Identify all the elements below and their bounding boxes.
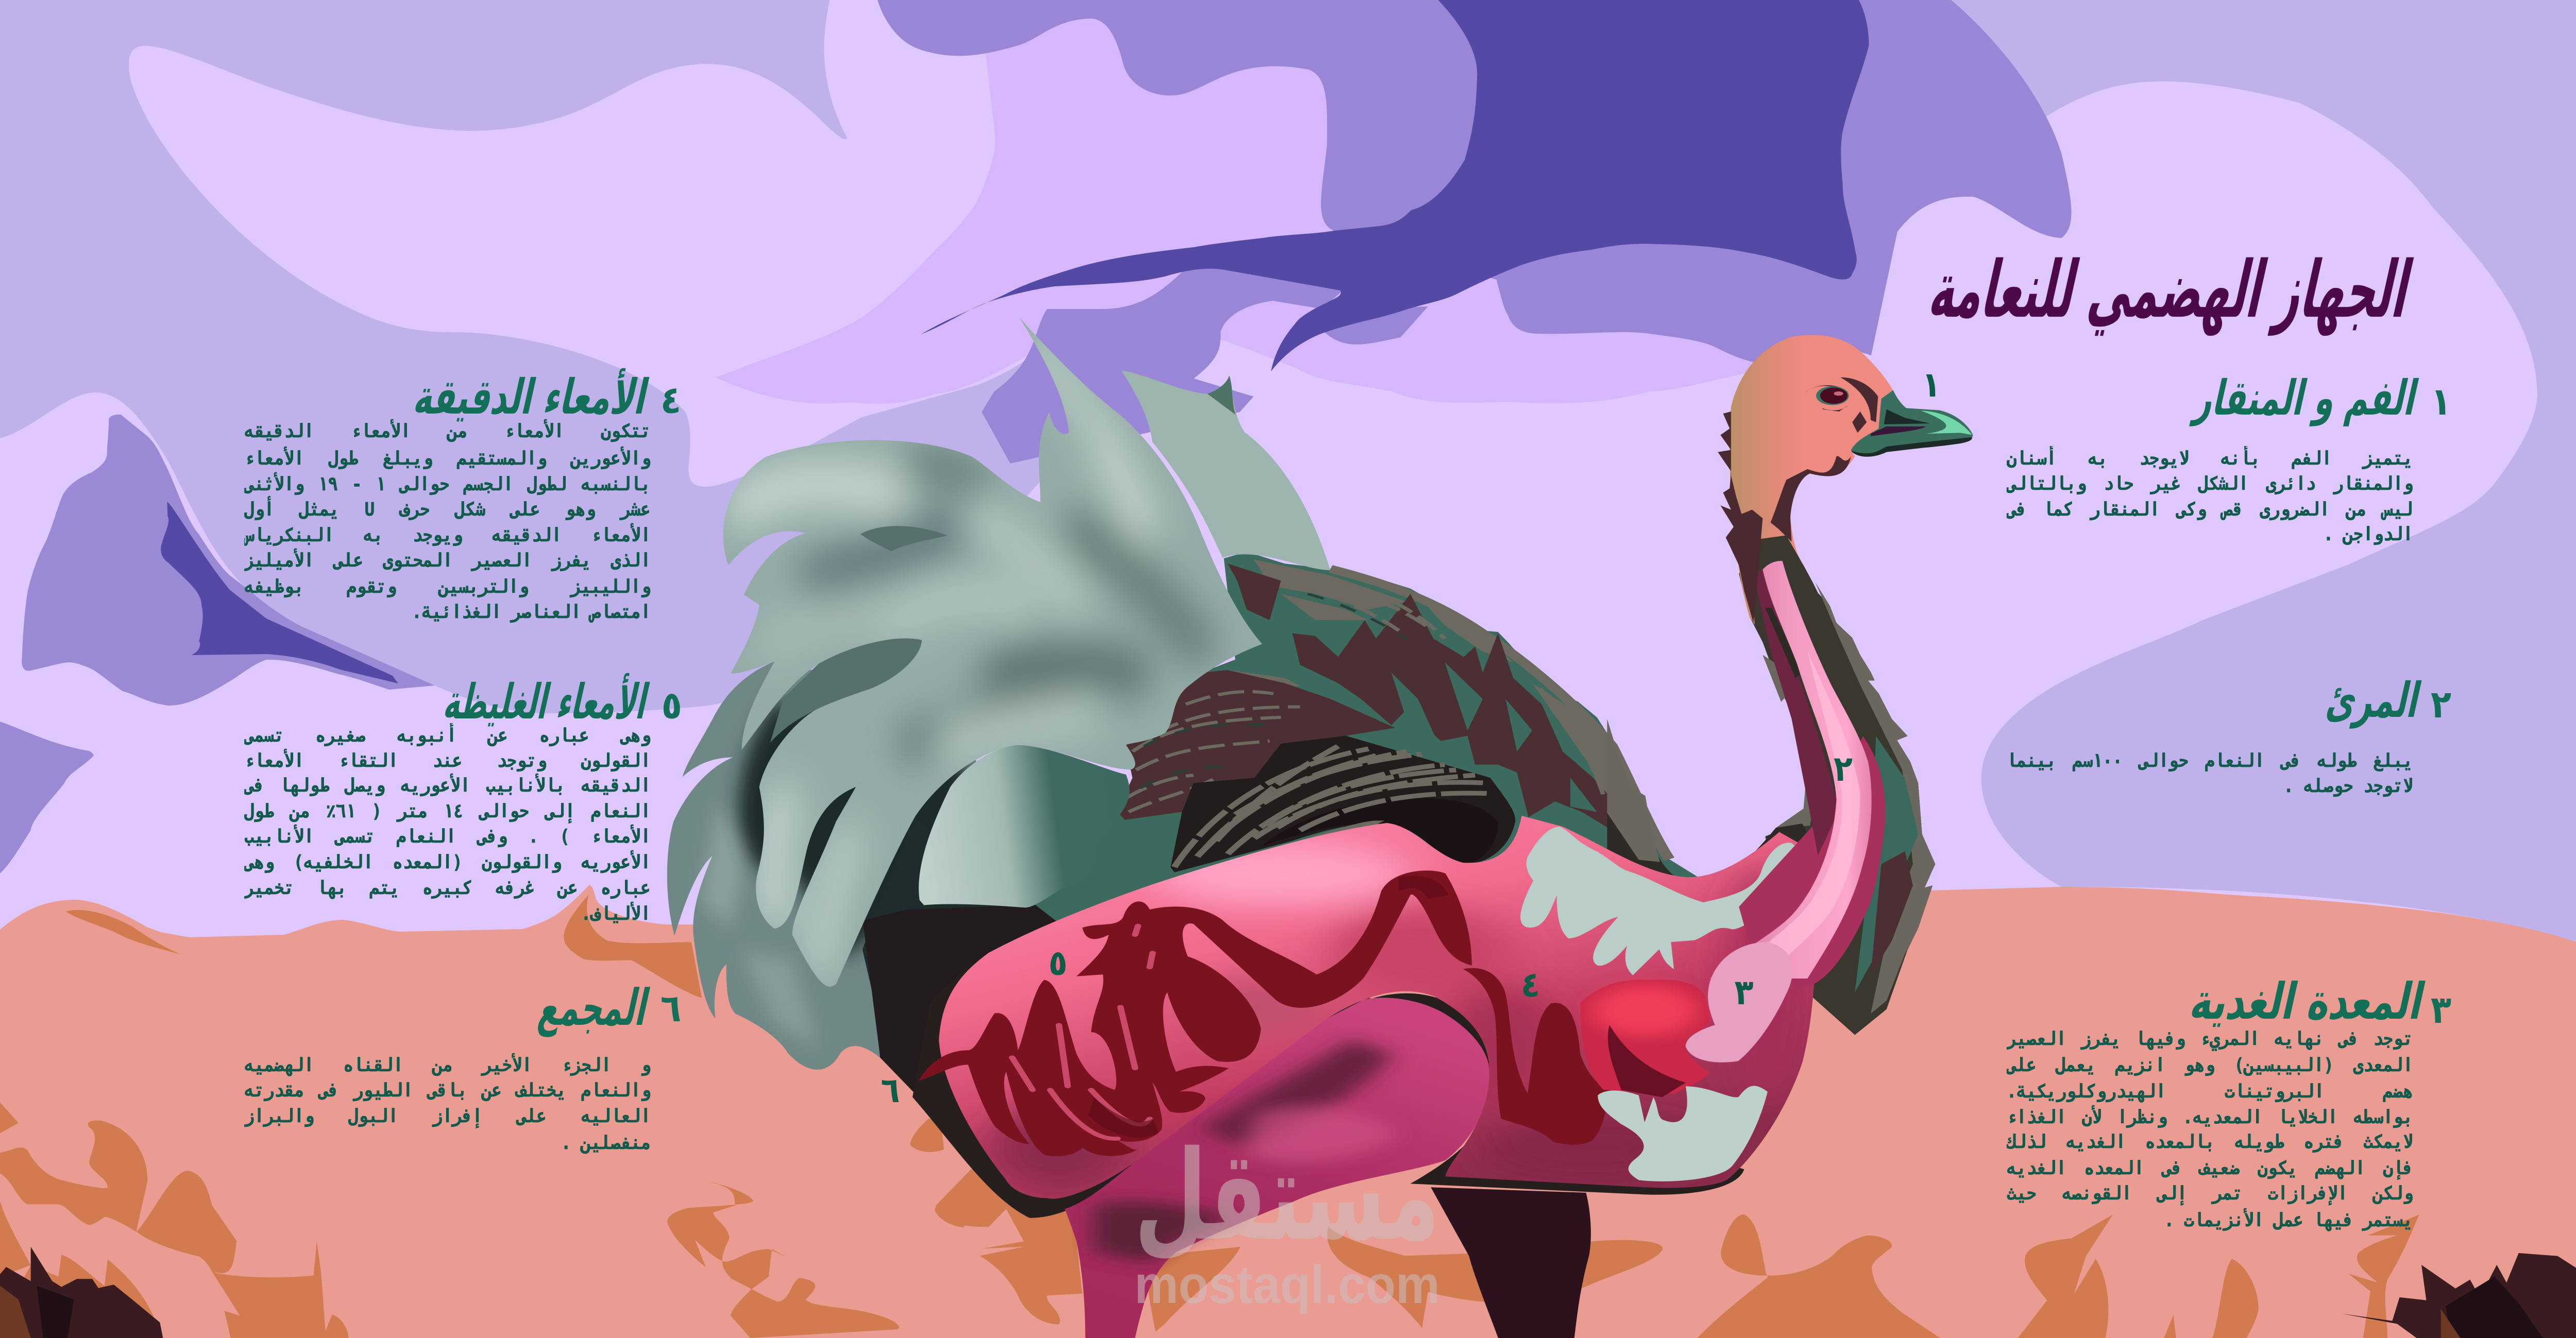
callout numbers on the ostrich: ١ bbox=[1922, 365, 1941, 405]
head: eye bbox=[1804, 385, 1849, 411]
text block: section 3 glandular stomach: توجد فى نهايه المريء وفيها يفرز العصير bbox=[2007, 1028, 2413, 1050]
text block: section 5 large intestine: الألياف. bbox=[581, 903, 651, 924]
ostrich: main wing feathers bbox=[723, 318, 1262, 987]
text block: section 4 small intestine: عشر وهو على شكل حرف U يمثل أول bbox=[244, 499, 651, 520]
watermark: mostaql.com bbox=[1134, 1255, 1440, 1314]
text block: section 1 mouth and beak bbox=[2007, 446, 2413, 549]
ostrich: neck underside band bbox=[1607, 792, 1818, 896]
ostrich: body with digestive organs bbox=[912, 335, 1973, 1338]
corner tuft left bbox=[0, 1247, 163, 1338]
text block: section 5 large intestine: الدقيقه بالأنابيب الأعوريه ويصل طولها فى bbox=[244, 775, 651, 796]
text block: section 3 glandular stomach: المعدى (البيبسين) وهو انزيم يعمل على bbox=[2007, 1055, 2413, 1076]
text block: section 5 large intestine bbox=[244, 723, 651, 930]
text block: section 4 small intestine: والليبيز والتربسين وتقوم بوظيفه bbox=[244, 576, 651, 597]
heading 5 with number: ٥ bbox=[662, 683, 682, 728]
organ: thigh shading bbox=[1094, 1039, 1399, 1263]
text block: section 6 cloaca: منفصلين . bbox=[561, 1133, 651, 1154]
text block: section 6 cloaca: والنعام يختلف عن باقى الطيور فى مقدرته bbox=[244, 1080, 651, 1101]
callout numbers on the ostrich: ٣ bbox=[1735, 972, 1754, 1013]
text block: section 4 small intestine: الأمعاء الدقيقه ويوجد به البنكرياس bbox=[244, 525, 651, 546]
text block: section 1 mouth and beak: الدواجن . bbox=[2324, 524, 2413, 545]
background: orange sand patterns bbox=[0, 895, 2419, 1338]
corner tuft right bbox=[2341, 1253, 2576, 1338]
heading 5 with number: الأمعاء الغليظة bbox=[439, 673, 654, 730]
organ: gizzard upper band bbox=[1520, 827, 1801, 975]
text block: section 1 mouth and beak: والمنقار دائرى الشكل غير حاد وبالتالى bbox=[2007, 473, 2413, 494]
text block: section 3 glandular stomach bbox=[2007, 1026, 2413, 1233]
background: lower-left violet wedge bbox=[0, 722, 94, 873]
background: lavender upper-left field bbox=[0, 0, 1056, 713]
watermark bbox=[1134, 1124, 1440, 1314]
text block: section 4 small intestine: تتكون الأمعاء من الأمعاء الدقيقه bbox=[244, 421, 651, 442]
organ: glandular stomach bbox=[1580, 980, 1710, 1097]
ostrich: head bbox=[1730, 335, 1893, 625]
ostrich: inner wing lobe bbox=[919, 745, 1129, 907]
text block: section 6 cloaca: العاليه على إفراز البول والبراز bbox=[244, 1106, 651, 1127]
background: left indigo dune bbox=[161, 502, 398, 683]
heading 4 with number: ٤ bbox=[660, 378, 681, 422]
organ: esophagus swirl bbox=[1686, 942, 1792, 1062]
callout numbers on the ostrich bbox=[881, 365, 1941, 1111]
organ: esophagus tube and neck maroon bbox=[1710, 561, 1886, 1001]
text block: section 2 esophagus: يبلغ طوله فى النعام حوالى ١٠٠سم بينما bbox=[2007, 750, 2413, 771]
text block: section 5 large intestine: الأعوريه والقولون (المعده الخلفيه) وهى bbox=[244, 852, 651, 873]
text block: section 3 glandular stomach: ولكن الإفرازات تمر إلى القونصه حيث bbox=[2007, 1183, 2413, 1204]
text block: section 4 small intestine bbox=[244, 419, 651, 626]
text block: section 5 large intestine: الأمعاء ) . وفى النعام تسمى الأنابيب bbox=[244, 826, 651, 847]
background: violet cloud layer bbox=[877, 0, 2072, 464]
text block: section 2 esophagus bbox=[2007, 748, 2413, 800]
callout numbers on the ostrich: ٥ bbox=[1048, 943, 1067, 984]
text block: section 5 large intestine: القولون وتوجد عند التقاء الأمعاء bbox=[244, 750, 651, 771]
heading 1 with number: ١ bbox=[2431, 379, 2451, 424]
ostrich: lower dark tail feathers bbox=[667, 661, 1038, 1077]
watermark: مستقل bbox=[1134, 1124, 1440, 1268]
title: الجهاز الهضمي للنعامة bbox=[1922, 244, 2420, 336]
organ: gizzard lower band bbox=[1598, 1086, 1768, 1181]
callout numbers on the ostrich: ٦ bbox=[881, 1070, 900, 1111]
text block: section 5 large intestine: النعام إلى حوالى ١٤ متر ( ٦١٪ من طول bbox=[244, 801, 651, 822]
ostrich: tail feather tip accents bbox=[1207, 375, 1236, 415]
text block: section 5 large intestine: عباره عن غرفه كبيره يتم بها تخمير bbox=[244, 878, 651, 899]
ostrich: far leg bbox=[1431, 1187, 1591, 1338]
ostrich: upper wing lobe feather bbox=[1122, 371, 1330, 570]
text block: section 3 glandular stomach: فإن الهضم يكون ضعيف فى المعده الغديه bbox=[2007, 1158, 2413, 1179]
text block: section 4 small intestine: بالنسبه لطول الجسم حوالى ١ - ١٩ والأثنى bbox=[244, 474, 651, 495]
ostrich: back fur beside neck base bbox=[1607, 719, 1660, 862]
head: markings bbox=[1718, 378, 1878, 623]
ostrich: back plumage bbox=[1007, 552, 1699, 927]
text block: section 4 small intestine: الذى يفرز العصير المحتوى على الأميليز bbox=[244, 550, 651, 571]
text block: section 3 glandular stomach: بواسطه الخلايا المعديه. ونظرا لأن الغذاء bbox=[2007, 1107, 2413, 1128]
text block: section 6 cloaca bbox=[244, 1053, 651, 1157]
organ: small intestine bbox=[919, 870, 1472, 1156]
heading 1 with number: الفم و المنقار bbox=[2189, 370, 2424, 427]
callout numbers on the ostrich: ٢ bbox=[1834, 749, 1853, 790]
background: dark indigo swoosh bbox=[921, 0, 1869, 371]
head: beak bbox=[1851, 390, 1973, 457]
text block: section 1 mouth and beak: ليس من الضرورى قص وكى المنقار كما فى bbox=[2007, 499, 2413, 520]
text block: section 3 glandular stomach: هضم البروتينات الهيدروكلوريكية. bbox=[2007, 1081, 2413, 1102]
ostrich: neck plumage bbox=[1739, 535, 1935, 1035]
background: lavender right field bbox=[1951, 0, 2576, 942]
heading 6 with number: المجمع bbox=[534, 978, 655, 1037]
background: sand dune bbox=[0, 885, 2576, 1338]
heading 3 with number: المعدة الغدية bbox=[2185, 972, 2431, 1031]
text block: section 5 large intestine: وهى عباره عن أنبوبه صغيره تسمى bbox=[244, 725, 651, 746]
text block: section 3 glandular stomach: يستمر فيها عمل الأنزيمات . bbox=[2164, 1210, 2413, 1231]
text block: section 2 esophagus: لاتوجد حوصله . bbox=[2283, 776, 2413, 797]
text block: section 4 small intestine: امتصاص العناصر الغذائية. bbox=[412, 602, 651, 623]
heading 4 with number: الأمعاء الدقيقة bbox=[410, 368, 654, 425]
heading 2 with number: المرئ bbox=[2321, 673, 2426, 729]
text block: section 6 cloaca: و الجزء الأخير من القناه الهضميه bbox=[244, 1055, 651, 1076]
background: left violet dune bbox=[22, 415, 435, 706]
heading 6 with number: ٦ bbox=[660, 986, 681, 1031]
body: soft shading bbox=[989, 841, 1808, 1191]
text block: section 3 glandular stomach: لايمكث فتره طويله بالمعده الغديه لذلك bbox=[2007, 1131, 2413, 1153]
organ: thigh bbox=[1065, 998, 1489, 1338]
heading 3 with number: ٣ bbox=[2431, 987, 2451, 1032]
text block: section 1 mouth and beak: يتميز الفم بأنه لايوجد به أسنان bbox=[2007, 448, 2413, 469]
heading 2 with number: ٢ bbox=[2431, 682, 2451, 727]
callout numbers on the ostrich: ٤ bbox=[1521, 965, 1540, 1005]
organ: large intestine bbox=[1463, 968, 1609, 1145]
background: pink-lilac cloud bbox=[716, 0, 1791, 404]
ostrich: dark underlay between tail and flank bbox=[863, 884, 1153, 1115]
body: pink flank bbox=[939, 816, 1816, 1199]
text block: section 4 small intestine: والأعورين والمستقيم ويبلغ طول الأمعاء bbox=[244, 448, 651, 469]
